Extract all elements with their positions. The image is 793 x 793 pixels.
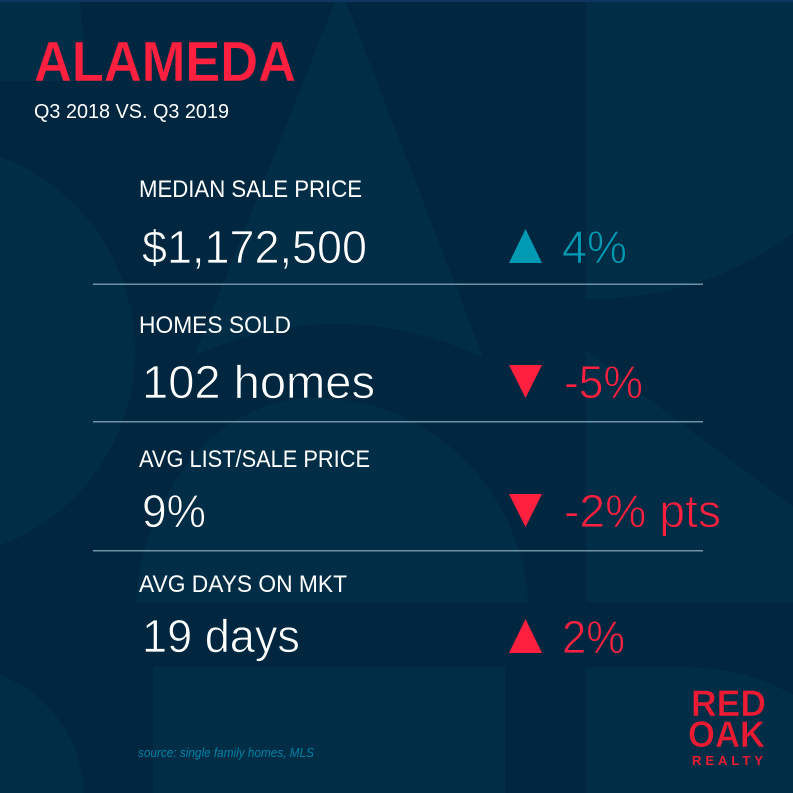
panel: average days on market [139,571,625,663]
logo: Red Oak Realty: OAK [688,714,765,755]
label: average list/sale price: AVG LIST/SALE PRICE [139,446,370,473]
label: homes sold: HOMES SOLD [139,312,291,339]
panel: homes sold [139,312,643,408]
change: average days on market: 2% [562,611,625,663]
divider 2 [93,421,703,422]
icon: down triangle [509,365,542,398]
logo: Red Oak Realty: RED [691,683,766,724]
change: median sale price: 4% [562,221,627,273]
label: median sale price: MEDIAN SALE PRICE [139,176,362,203]
divider 3 [93,550,703,552]
label: average days on market: AVG DAYS ON MKT [139,571,347,598]
value: homes sold: 102 homes [142,356,375,408]
value: average days on market: 19 days [142,610,300,662]
subtitle: Q3 2018 VS. Q3 2019 [34,101,229,123]
panel: median sale price [139,176,627,273]
change: homes sold: -5% [564,356,643,408]
icon: up triangle [509,619,542,653]
value: average list/sale price: 9% [142,485,206,537]
source note: source: single family homes, MLS [138,746,315,760]
logo: Red Oak Realty [688,683,766,768]
logo: Red Oak Realty: REALTY [692,753,763,768]
panel: average list/sale price [139,446,721,537]
icon: up triangle [509,229,542,263]
value: median sale price: $1,172,500 [142,221,367,273]
divider 1 [93,284,703,285]
icon: down triangle [509,494,542,527]
title: ALAMEDA [34,30,296,94]
change: average list/sale price: -2% pts [564,485,721,537]
